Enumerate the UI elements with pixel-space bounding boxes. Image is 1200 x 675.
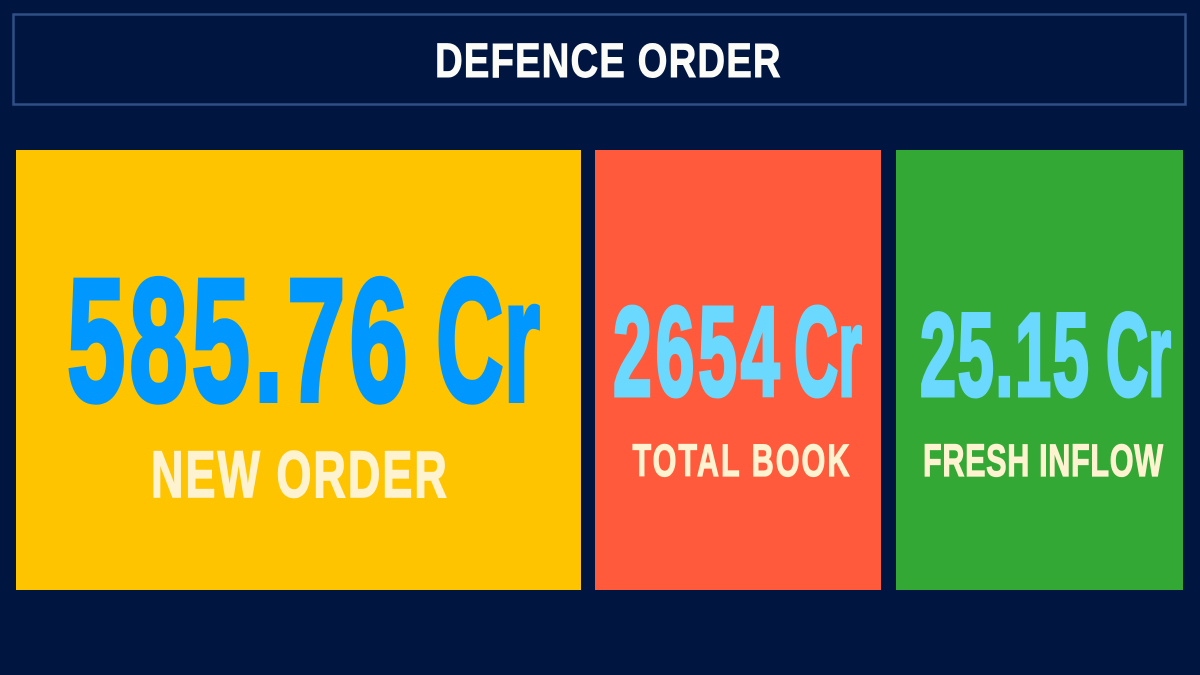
panel: total book: Cr (794, 280, 862, 422)
value: total book (613, 280, 862, 423)
title: DEFENCE ORDER (435, 35, 781, 88)
value: fresh inflow: 25.15 (920, 290, 1089, 422)
label: total book: TOTAL BOOK (632, 436, 850, 487)
panel: new order (16, 150, 581, 590)
value: total book: 2654 (613, 280, 780, 423)
label: new order: NEW ORDER (151, 437, 447, 511)
panel: total book (595, 150, 881, 590)
value: new order: Cr (436, 244, 540, 438)
label: fresh inflow: FRESH INFLOW (923, 436, 1164, 487)
title banner (14, 14, 1186, 104)
value: fresh inflow (920, 290, 1171, 422)
value: new order: 585.76 (67, 242, 408, 438)
panel: fresh inflow (896, 150, 1183, 590)
